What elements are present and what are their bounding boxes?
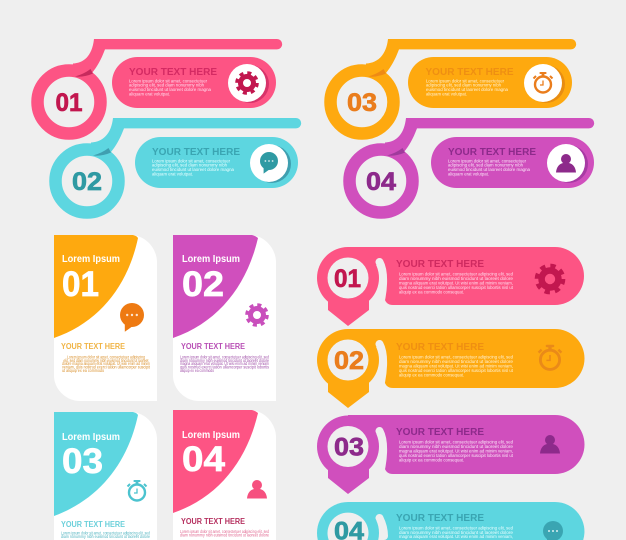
pin marker 04	[317, 502, 379, 540]
card 01 text: YOUR TEXT HERE	[61, 342, 126, 351]
pill 03	[408, 57, 572, 108]
card 01 text	[61, 342, 151, 373]
card 01 text: Lorem ipsum dolor sit amet, consectetuer adipiscing	[67, 354, 146, 360]
card 04 text: diam nonummy nibh euismod tincidunt ut laoreet dolore	[180, 532, 270, 538]
notch 04	[380, 518, 384, 536]
panel: band 02	[317, 329, 584, 408]
card 01 text: ut aliquip ex ea commodo	[62, 368, 105, 373]
ring and connector 02	[56, 118, 301, 212]
band shape 03	[348, 415, 584, 474]
band shape 01	[348, 247, 584, 305]
pin marker 02: 02	[334, 347, 364, 375]
card 02 labels: Lorem Ipsum	[182, 254, 240, 265]
ring and connector 03: 03	[347, 89, 377, 117]
card 04 labels: Lorem Ipsum	[182, 430, 240, 441]
band text 02: YOUR TEXT HERE	[396, 342, 484, 353]
card 03 text: Lorem ipsum dolor sit amet, consectetuer adipiscing elit, sed	[61, 530, 151, 536]
band shape 04	[348, 502, 584, 540]
band text 01	[396, 259, 514, 294]
pin marker 02	[317, 329, 379, 408]
icon: gear in white circle	[228, 64, 269, 103]
band text 03: diam nonummy nibh euismod tincidunt ut laoreet dolore	[399, 444, 514, 449]
card 03 labels	[62, 432, 120, 481]
pill 03: YOUR TEXT HERE	[426, 67, 514, 78]
band text 04: YOUR TEXT HERE	[396, 513, 484, 524]
panel: card 04	[173, 410, 276, 540]
panel: band 04	[317, 502, 584, 540]
band text 01: quis nostrud exerci tation ullamcorper suscipit lobortis nisl ut	[399, 285, 514, 290]
pill 02: Lorem ipsum dolor sit amet, consectetuer	[152, 158, 231, 164]
card 04 labels: 04	[182, 440, 226, 479]
card 04 body	[173, 410, 276, 540]
card 02 text: quis nostrud exerci tation ullamcorper suscipit lobortis	[180, 364, 269, 370]
pill 01: adipiscing elit, sed diam nonummy nibh	[129, 82, 205, 88]
band text 03: quis nostrud exerci tation ullamcorper suscipit lobortis nisl ut	[399, 453, 514, 458]
card 01 labels: Lorem Ipsum	[62, 254, 120, 265]
card 03 text	[61, 520, 151, 539]
pill 04	[431, 137, 594, 188]
pill 02	[135, 137, 298, 188]
pin marker 03: 03	[334, 434, 364, 462]
pill 01: YOUR TEXT HERE	[129, 67, 217, 78]
card 04 text: Lorem ipsum dolor sit amet, consectetuer adipiscing elit, sed	[180, 529, 270, 534]
band text 04: diam nonummy nibh euismod tincidunt ut laoreet dolore	[399, 530, 514, 535]
panel: top item 04	[350, 118, 594, 212]
card 01 labels: 01	[62, 265, 99, 304]
band text 01: YOUR TEXT HERE	[396, 259, 484, 270]
ring and connector 01	[38, 39, 282, 134]
card 03 text: diam nonummy nibh euismod tincidunt ut laoreet dolore	[61, 534, 151, 539]
ring and connector 04	[350, 118, 594, 212]
panel: card 01	[54, 235, 157, 401]
panel: top item 02	[56, 118, 301, 212]
card 02 text: aliquip ex ea commodo	[180, 368, 215, 373]
pill 04: adipiscing elit, sed diam nonummy nibh	[448, 162, 524, 168]
ring and connector 04: 04	[366, 168, 396, 196]
pin marker 03	[317, 416, 379, 494]
band text 02: aliquip ex ea commodo consequat.	[399, 372, 464, 378]
pill 03: aliquam erat volutpat.	[426, 92, 467, 96]
band text 04	[396, 513, 514, 539]
pill 02: euismod tincidunt ut laoreet dolore magna	[152, 167, 235, 172]
pill 04: YOUR TEXT HERE	[448, 147, 536, 158]
icon: person in white circle	[547, 144, 588, 183]
card 02 text: YOUR TEXT HERE	[181, 342, 246, 351]
card 01 text: veniam, quis nostrud exerci tation ullamcorper suscipit	[62, 364, 151, 370]
band text 02: quis nostrud exerci tation ullamcorper suscipit lobortis nisl ut	[399, 368, 514, 373]
card 02 text: Lorem ipsum dolor sit amet, consectetuer adipiscing elit, sed	[180, 354, 270, 360]
band text 02: magna aliquam erat volutpat. Ut wisi enim ad minim veniam,	[399, 364, 513, 368]
card 02 text: diam nonummy nibh euismod tincidunt ut laoreet dolore	[180, 358, 270, 363]
band text 03	[396, 427, 514, 462]
card 02 labels	[182, 254, 240, 304]
card 02 body	[173, 235, 276, 401]
icon: chat	[120, 303, 144, 332]
card 03 labels: Lorem Ipsum	[62, 432, 120, 443]
pill 02: aliquam erat volutpat.	[152, 172, 193, 176]
panel: top item 03	[330, 39, 576, 134]
icon: person	[247, 480, 267, 498]
card 01 body	[54, 235, 157, 401]
panel: band 01	[317, 247, 584, 326]
card 01 text: elit, sed diam nonummy nibh euismod tincidunt ut laoreet	[64, 358, 149, 363]
band text 02: diam nonummy nibh euismod tincidunt ut laoreet dolore	[399, 359, 514, 364]
icon: chat in white circle	[250, 144, 291, 183]
ring and connector 03	[330, 39, 576, 134]
pill 04: aliquam erat volutpat.	[448, 172, 489, 176]
card 04 text: YOUR TEXT HERE	[181, 517, 246, 526]
icon: stopwatch	[128, 480, 146, 500]
pill 04: euismod tincidunt ut laoreet dolore magna	[448, 167, 531, 172]
card 02 text	[180, 342, 270, 373]
card 03 text: YOUR TEXT HERE	[61, 520, 126, 529]
pin marker 01: 01	[334, 265, 361, 293]
panel: top item 01	[38, 39, 282, 134]
ring and connector 01: 01	[56, 89, 83, 117]
band text 02	[396, 342, 514, 378]
band text 01: magna aliquam erat volutpat. Ut wisi enim ad minim veniam,	[399, 280, 513, 286]
pill 03: Lorem ipsum dolor sit amet, consectetuer	[426, 78, 505, 84]
panel: card 03	[54, 412, 157, 540]
band text 03: aliquip ex ea commodo consequat.	[399, 458, 464, 462]
card 01 colour header	[54, 235, 138, 338]
card 04 text	[180, 517, 270, 538]
card 04 colour header	[173, 410, 258, 513]
card 03 body	[54, 412, 157, 540]
pill 01: Lorem ipsum dolor sit amet, consectetuer	[129, 78, 208, 84]
icon: gear	[247, 305, 267, 325]
pill 01	[112, 57, 276, 108]
pill 02: YOUR TEXT HERE	[152, 147, 240, 158]
band shape 02	[348, 329, 584, 388]
ring and connector 02: 02	[72, 168, 102, 196]
icon: gear	[537, 266, 563, 292]
pill 01: aliquam erat volutpat.	[129, 92, 170, 96]
band text 03: Lorem ipsum dolor sit amet, consectetuer adipiscing elit, sed	[399, 440, 514, 444]
card 04 labels	[182, 430, 240, 479]
panel: band 03	[317, 415, 584, 494]
notch 02	[378, 344, 383, 394]
card 02 colour header	[173, 235, 258, 338]
icon: stopwatch in white circle	[524, 64, 565, 103]
band text 01: diam nonummy nibh euismod tincidunt ut laoreet dolore	[399, 276, 514, 281]
panel: card 02	[173, 235, 276, 401]
card 02 text: magna aliquam erat volutpat. Ut wisi enim ad minim veniam	[180, 361, 269, 366]
pill 03: adipiscing elit, sed diam nonummy nibh	[426, 82, 502, 88]
icon: stopwatch	[539, 345, 561, 369]
notch 01	[378, 262, 383, 312]
notch 03	[378, 431, 383, 481]
card 02 labels: 02	[182, 265, 224, 304]
pin marker 01	[317, 247, 379, 326]
card 01 labels	[62, 254, 120, 304]
card 03 labels: 03	[62, 442, 103, 481]
icon: person	[540, 435, 560, 454]
band text 04: magna aliquam erat volutpat. Ut wisi enim ad minim veniam,	[399, 534, 513, 539]
card 01 text: dolore magna aliquam erat volutpat. Ut wisi enim ad minim	[62, 361, 150, 366]
band text 03: YOUR TEXT HERE	[396, 427, 484, 438]
band text 03: magna aliquam erat volutpat. Ut wisi enim ad minim veniam,	[399, 448, 513, 454]
band text 02: Lorem ipsum dolor sit amet, consectetuer adipiscing elit, sed	[399, 354, 514, 360]
band text 01: aliquip ex ea commodo consequat.	[399, 290, 464, 294]
icon: chat	[543, 521, 563, 540]
band text 04: Lorem ipsum dolor sit amet, consectetuer adipiscing elit, sed	[399, 526, 514, 530]
pill 02: adipiscing elit, sed diam nonummy nibh	[152, 162, 228, 168]
pill 04: Lorem ipsum dolor sit amet, consectetuer	[448, 158, 527, 164]
band text 01: Lorem ipsum dolor sit amet, consectetuer adipiscing elit, sed	[399, 272, 514, 276]
card 03 colour header	[54, 412, 138, 516]
pill 03: euismod tincidunt ut laoreet dolore magna	[426, 87, 509, 92]
pill 01: euismod tincidunt ut laoreet dolore magna	[129, 87, 212, 92]
